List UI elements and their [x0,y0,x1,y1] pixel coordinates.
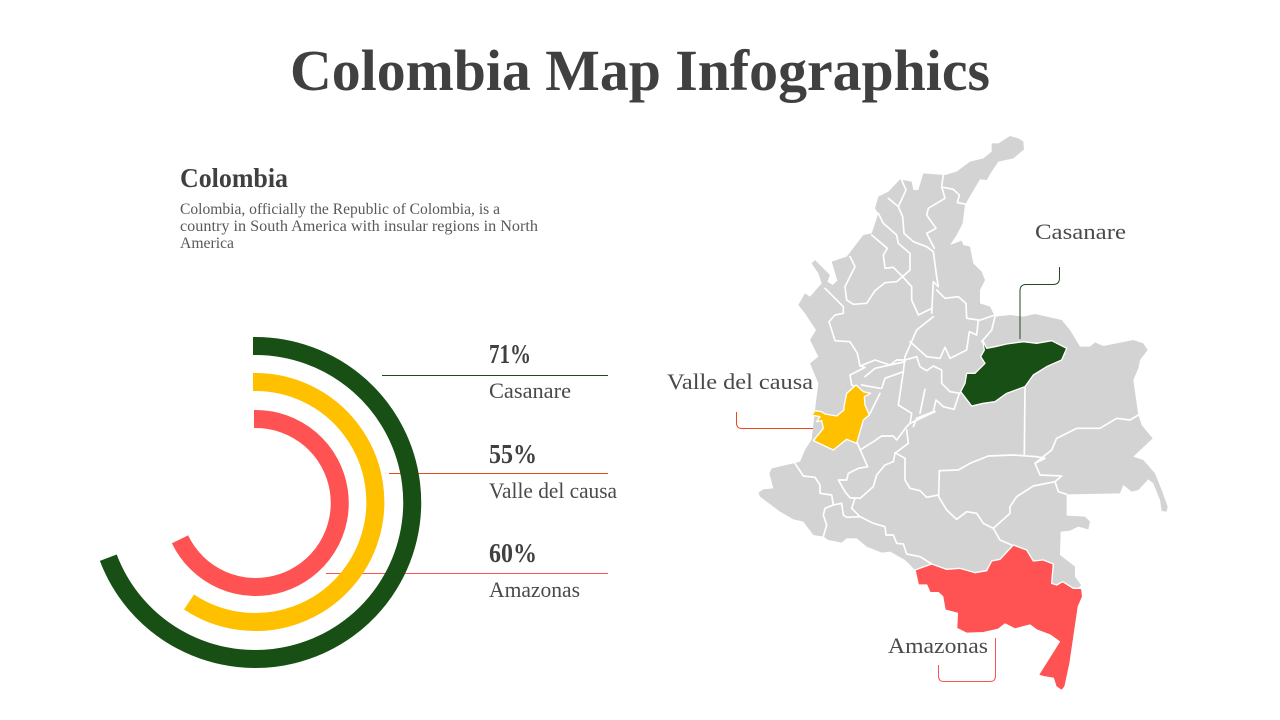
region: Valle del causa [812,385,871,450]
stat: Valle del causa: Valle del causa [489,478,617,503]
leader lines [326,376,608,574]
region: Amazonas [915,545,1083,691]
description: America [180,235,234,252]
heading: Colombia: Colombia [180,163,288,193]
callout: Casanare: Casanare [1035,219,1126,244]
stat: Valle del causa: 55% [489,439,537,469]
stat: Casanare [489,339,571,403]
map silhouette [758,136,1168,588]
ring: Casanare 71% [108,346,412,659]
description: country in South America with insular regions in North [180,218,538,235]
stat: Amazonas [489,538,580,602]
ring: Amazonas 60% [180,419,340,587]
region: Casanare [961,340,1067,406]
ring: Valle del causa 55% [189,382,375,622]
text block: Colombia intro [180,163,538,252]
callout: Casanare [1020,219,1126,339]
stat: Casanare: Casanare [489,378,571,403]
callout: Amazonas: Amazonas [888,633,988,658]
map of Colombia [758,136,1168,691]
stat: Amazonas: 60% [489,538,537,568]
callout: Amazonas [888,633,996,682]
stat: Amazonas: Amazonas [489,577,580,602]
chart: radial progress rings [108,346,608,659]
stat: Casanare: 71% [489,339,531,369]
title: Colombia Map Infographics [290,38,990,103]
department borders [795,175,1138,564]
stat: Valle del causa [489,439,617,503]
description: Colombia, officially the Republic of Colombia, is a [180,201,500,218]
description [180,201,538,252]
callout: Valle del causa [667,369,813,428]
callout: Valle del causa: Valle del causa [667,369,813,394]
